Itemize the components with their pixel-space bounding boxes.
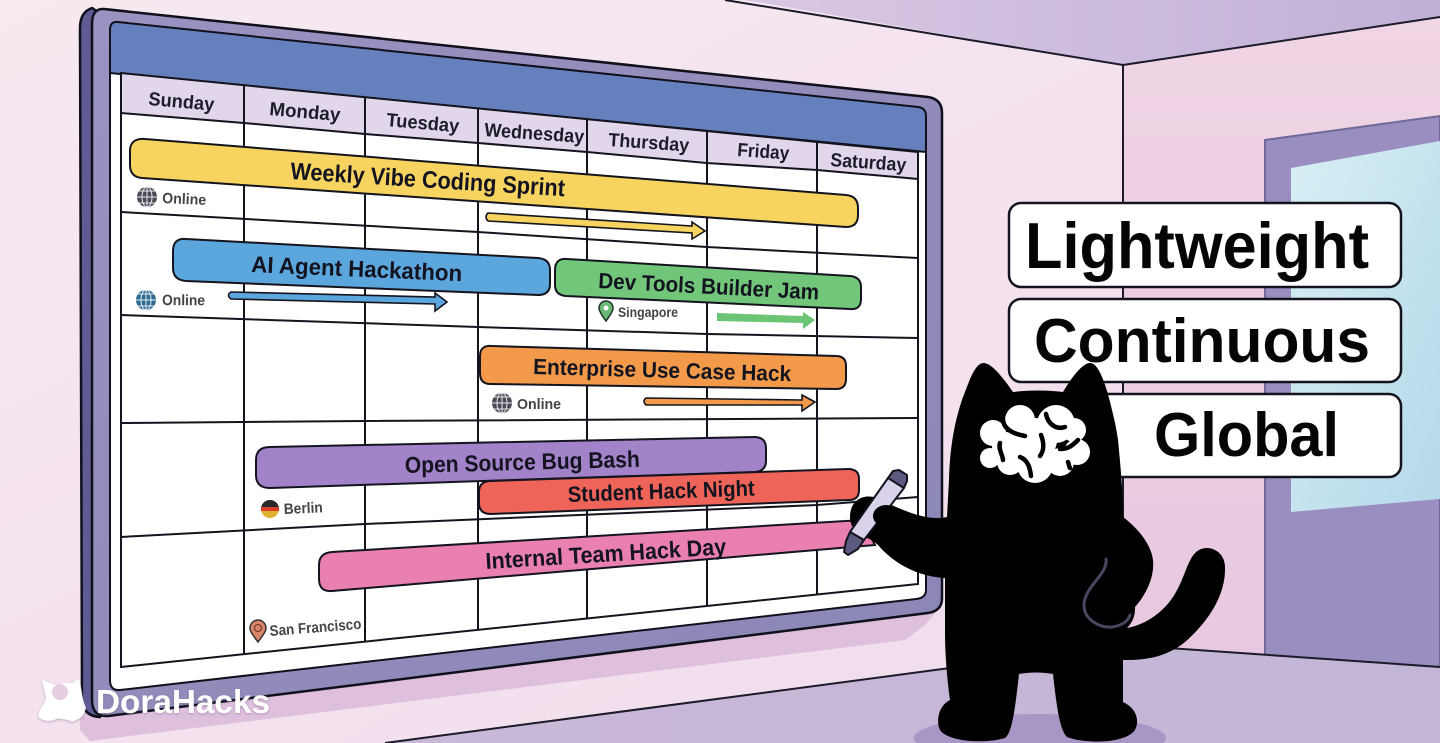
arrow: green — [717, 312, 815, 329]
event: Dev Tools Builder Jam: Dev Tools Builder Jam — [598, 268, 820, 305]
window frame — [1265, 116, 1440, 667]
event: Enterprise Use Case Hack: Enterprise Use Case Hack — [533, 354, 792, 386]
cat fingers — [873, 505, 899, 527]
arm contour — [1084, 559, 1130, 627]
event: Open Source Bug Bash — [256, 437, 766, 518]
header band — [110, 22, 926, 160]
arrow: blue — [228, 292, 447, 311]
location: online — [136, 290, 205, 310]
arrow: yellow — [486, 213, 705, 239]
weekday labels: Saturday — [830, 150, 907, 176]
weekday labels: Monday — [269, 99, 342, 126]
ceiling — [745, 0, 1440, 65]
location: Berlin — [261, 499, 323, 518]
location: Singapore — [599, 301, 678, 321]
right wall — [1123, 17, 1440, 667]
board side edge — [80, 8, 110, 717]
tagline: Lightweight: Lightweight — [1025, 209, 1369, 282]
floor — [385, 646, 1440, 743]
weekday labels: Thursday — [608, 130, 690, 157]
location: online: Online — [162, 190, 207, 209]
location: San Francisco — [250, 616, 362, 642]
window glass — [1291, 141, 1440, 512]
location: San Francisco: San Francisco — [269, 616, 362, 640]
board frame — [92, 9, 942, 716]
event: Open Source Bug Bash: Open Source Bug Bash — [404, 446, 640, 478]
event: Weekly Vibe Coding Sprint — [130, 139, 858, 239]
cat mascot — [844, 363, 1225, 742]
event: AI Agent Hackathon — [136, 239, 550, 311]
DoraHacks logo: DoraHacks — [96, 683, 270, 720]
weekday labels: Sunday — [148, 89, 216, 116]
tagline: Continuous: Continuous — [1034, 307, 1370, 376]
arrow: orange — [644, 395, 815, 411]
location: online: Online — [517, 396, 561, 413]
location: Berlin: Berlin — [283, 499, 323, 518]
event: Student Hack Night — [479, 469, 859, 514]
event: Dev Tools Builder Jam — [555, 259, 861, 329]
brain — [980, 405, 1090, 483]
location: Singapore: Singapore — [618, 304, 678, 320]
event: Enterprise Use Case Hack — [480, 346, 846, 413]
tagline: Global — [1009, 394, 1401, 477]
white calendar surface — [110, 73, 926, 690]
calendar board — [80, 8, 942, 717]
DoraHacks logo — [38, 678, 270, 722]
location: online: Online — [162, 292, 205, 309]
event: Internal Team Hack Day — [250, 520, 875, 642]
marker pen — [844, 470, 907, 555]
weekday labels: Friday — [737, 140, 790, 165]
location: online — [492, 393, 561, 413]
event: Internal Team Hack Day: Internal Team Hack Day — [485, 533, 727, 574]
tagline: Global: Global — [1154, 401, 1339, 470]
calendar grid — [121, 73, 918, 667]
weekday labels: Tuesday — [386, 110, 461, 137]
weekday labels — [148, 89, 907, 176]
weekday labels: Wednesday — [484, 120, 585, 148]
cat body — [850, 363, 1225, 742]
event: Student Hack Night: Student Hack Night — [567, 475, 756, 507]
weekday header row — [121, 73, 918, 179]
event: AI Agent Hackathon: AI Agent Hackathon — [251, 251, 463, 286]
event: Weekly Vibe Coding Sprint: Weekly Vibe Coding Sprint — [290, 158, 566, 202]
logo cat icon — [38, 678, 86, 722]
board shadow — [80, 590, 942, 741]
cat shadow — [914, 714, 1166, 743]
location: online — [137, 187, 207, 209]
